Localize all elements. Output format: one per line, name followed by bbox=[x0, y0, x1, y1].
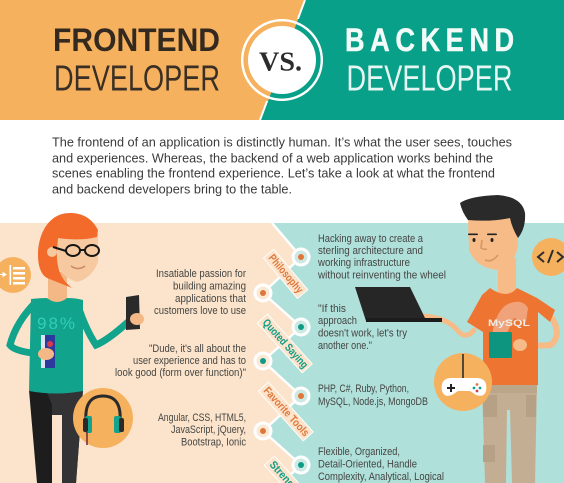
hair bbox=[38, 213, 98, 288]
intro paragraph bbox=[52, 135, 512, 196]
trousers bbox=[482, 385, 537, 483]
eyes bbox=[468, 234, 497, 242]
phone bbox=[126, 295, 140, 330]
backend text: strengths: Detail-Oriented, Handle bbox=[318, 458, 417, 470]
frontend text: tools: JavaScript, jQuery, bbox=[171, 424, 246, 436]
frontend text: philosophy: applications that bbox=[175, 293, 246, 305]
intro paragraph: and experiences. Whereas, the backend of a web application works behind the bbox=[52, 150, 493, 165]
right arm bbox=[522, 318, 557, 346]
frontend text: philosophy: Insatiable passion for bbox=[156, 268, 246, 280]
category label: favorite tools: Favorite Tools bbox=[261, 385, 311, 439]
frontend text: tools bbox=[158, 412, 247, 448]
vs badge bbox=[240, 19, 322, 101]
backend text: quote: "If this bbox=[318, 303, 347, 315]
frontend text: quote: user experience and has to bbox=[133, 355, 246, 367]
backend text: tools bbox=[318, 383, 428, 408]
frontend text: quote: look good (form over function)" bbox=[115, 367, 246, 379]
left arm sleeve bbox=[10, 302, 42, 354]
hand holding can bbox=[38, 348, 54, 360]
frontend text: tools: Bootstrap, Ionic bbox=[181, 436, 247, 448]
mouth and nose bbox=[481, 240, 498, 261]
backend text: tools: MySQL, Node.js, MongoDB bbox=[318, 396, 428, 408]
frontend text: philosophy bbox=[154, 268, 246, 317]
intro paragraph: scenes enabling the frontend experience. Let’s take a look at what the frontend bbox=[52, 166, 495, 181]
heading: backend developer bbox=[345, 23, 514, 98]
vs badge: VS. bbox=[259, 46, 302, 76]
backend text: philosophy: without reinventing the wheel bbox=[317, 270, 446, 282]
hand holding phone bbox=[130, 313, 144, 325]
header banner bbox=[0, 0, 564, 120]
energy drink can bbox=[41, 335, 55, 368]
torso shirt bbox=[29, 298, 83, 394]
t-shirt bbox=[467, 288, 555, 385]
heading: frontend developer: DEVELOPER bbox=[54, 58, 220, 98]
backend text: philosophy bbox=[317, 233, 446, 282]
intro paragraph: and backend developers bring to the table. bbox=[52, 181, 292, 196]
frontend text: quote bbox=[115, 343, 246, 379]
neck bbox=[498, 258, 516, 296]
backend text: tools: PHP, C#, Ruby, Python, bbox=[318, 383, 409, 395]
icon: game controller bbox=[434, 353, 492, 411]
neck bbox=[48, 272, 67, 306]
intro paragraph: The frontend of an application is distinctly human. It’s what the user sees, touches bbox=[52, 135, 512, 150]
shirt logo: MySQL bbox=[488, 318, 530, 329]
backend text: strengths: Complexity, Analytical, Logical bbox=[318, 471, 444, 483]
shirt logo bbox=[488, 302, 530, 335]
laptop bbox=[355, 287, 442, 322]
ear bbox=[47, 247, 57, 257]
coffee mug bbox=[489, 332, 512, 358]
icon: headphones bbox=[73, 388, 133, 448]
frontend text: philosophy: building amazing bbox=[173, 280, 246, 292]
frontend text: philosophy: customers love to use bbox=[154, 305, 246, 317]
mouth bbox=[71, 266, 85, 268]
backend text: quote: doesn't work, let's try bbox=[318, 328, 408, 340]
figure: backend developer man bbox=[424, 195, 557, 483]
left arm bbox=[424, 316, 474, 335]
heading: frontend developer bbox=[53, 22, 220, 98]
backend text: philosophy: sterling architecture and bbox=[318, 245, 423, 257]
backend text: strengths: Flexible, Organized, bbox=[318, 446, 400, 458]
glasses bbox=[53, 245, 99, 256]
pants bbox=[29, 390, 83, 483]
face bbox=[468, 215, 518, 270]
hair bbox=[460, 195, 525, 238]
icon: code brackets bbox=[532, 238, 564, 276]
panel: backend background with zigzag divider bbox=[263, 223, 564, 483]
backend text: quote: another one." bbox=[318, 340, 372, 352]
category label: philosophy: Philosophy bbox=[266, 252, 306, 296]
timeline nodes bbox=[254, 248, 310, 474]
figure: frontend developer woman bbox=[10, 213, 144, 483]
frontend text: quote: "Dude, it's all about the bbox=[149, 343, 246, 355]
backend text: quote bbox=[318, 303, 408, 352]
panel: frontend background bbox=[0, 223, 564, 483]
shirt text: 98% bbox=[37, 314, 75, 333]
backend text: philosophy: working infrastructure bbox=[317, 257, 410, 269]
hand on mug bbox=[513, 339, 527, 351]
frontend text: tools: Angular, CSS, HTML5, bbox=[158, 412, 246, 424]
face bbox=[56, 234, 98, 282]
icon: list bbox=[0, 257, 31, 293]
backend text: philosophy: Hacking away to create a bbox=[318, 233, 423, 245]
category label: quoted saying bbox=[257, 314, 312, 373]
heading: frontend developer: FRONTEND bbox=[53, 22, 220, 58]
right arm sleeve bbox=[78, 306, 128, 345]
category label: quoted saying: Quoted Saying bbox=[260, 317, 310, 371]
backend text: strengths bbox=[318, 446, 444, 483]
backend text: quote: approach bbox=[318, 315, 357, 327]
heading: backend developer: DEVELOPER bbox=[346, 58, 512, 98]
heading: backend developer: BACKEND bbox=[345, 23, 514, 59]
